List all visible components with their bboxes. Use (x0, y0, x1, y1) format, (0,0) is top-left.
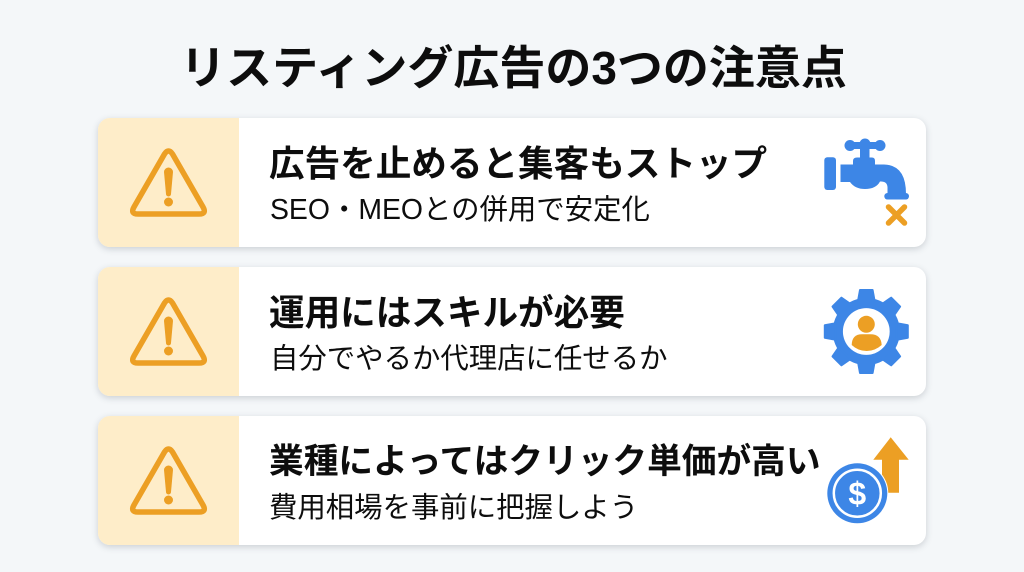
icon: warning triangle (130, 446, 208, 515)
icon: gear with person (824, 289, 909, 374)
warning side panel (98, 416, 239, 545)
icon: coin with up arrow (827, 437, 909, 524)
title: リスティング広告の3つの注意点 (180, 42, 847, 94)
panel: skill (98, 267, 926, 396)
heading: 業種によってはクリック単価が高い (269, 443, 821, 481)
panel: cost (98, 416, 926, 545)
heading: 運用にはスキルが必要 (269, 293, 625, 333)
icon: coin with up arrow: $ (848, 476, 866, 512)
subtext: 費用相場を事前に把握しよう (269, 492, 638, 524)
subtext: SEO・MEOとの併用で安定化 (270, 194, 650, 226)
heading: 広告を止めると集客もストップ (269, 144, 767, 184)
warning side panel (98, 267, 239, 396)
panel: stop (98, 118, 926, 247)
icon: faucet (824, 138, 909, 226)
icon: warning triangle (130, 297, 207, 366)
icon: warning triangle (130, 148, 207, 217)
warning side panel (98, 118, 239, 247)
subtext: 自分でやるか代理店に任せるか (270, 343, 667, 375)
